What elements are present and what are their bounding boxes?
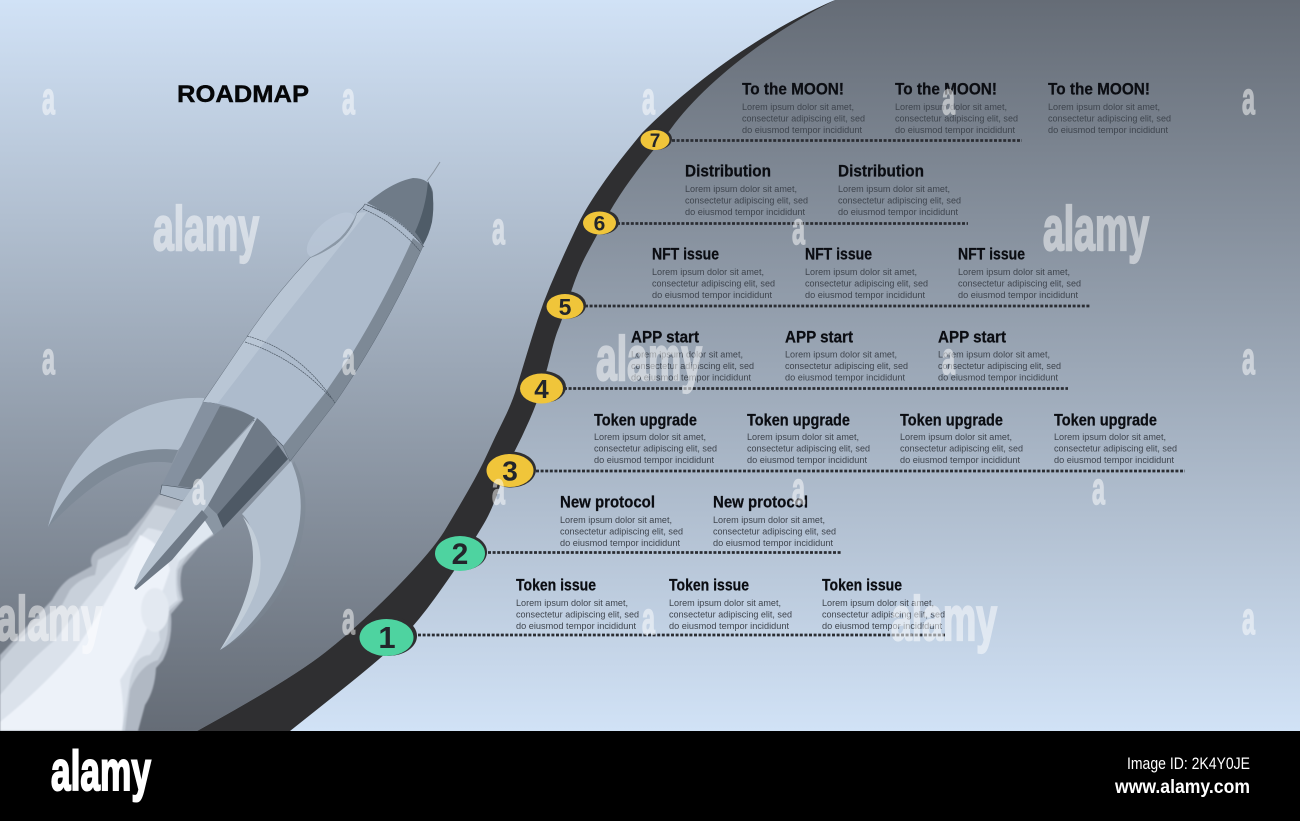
column 2: consectetur adipiscing elit, sed [785, 361, 908, 372]
column 4: do eiusmod tempor incididunt [1054, 455, 1174, 466]
watermarks: a [1242, 593, 1256, 644]
column 1: do eiusmod tempor incididunt [742, 125, 862, 136]
column 2: consectetur adipiscing elit, sed [895, 114, 1018, 124]
column 2: consectetur adipiscing elit, sed [805, 278, 928, 290]
column 1 [742, 80, 865, 136]
column 3: Lorem ipsum dolor sit amet, [900, 432, 1012, 443]
watermarks [0, 73, 1256, 654]
column 3: Token issue [822, 576, 902, 594]
column 2: Lorem ipsum dolor sit amet, [669, 598, 781, 609]
column 3 [822, 576, 945, 632]
marker 4 [520, 371, 566, 404]
column 1: Lorem ipsum dolor sit amet, [685, 184, 797, 195]
column 1: consectetur adipiscing elit, sed [742, 114, 865, 124]
marker 7: 7 [650, 131, 660, 152]
column 2: Lorem ipsum dolor sit amet, [785, 350, 897, 360]
column 4: Token upgrade [1054, 412, 1157, 430]
column 3 [958, 246, 1081, 301]
column 3: consectetur adipiscing elit, sed [938, 361, 1061, 372]
column 3 [900, 412, 1023, 466]
column 1: consectetur adipiscing elit, sed [631, 361, 754, 372]
column 2 [895, 80, 1018, 136]
marker 2: 2 [452, 538, 468, 571]
watermarks: a [792, 463, 806, 514]
watermarks: a [492, 463, 506, 514]
column 3 [1048, 80, 1171, 136]
column 2 [713, 494, 836, 549]
column 1 [631, 328, 754, 384]
watermarks: alamy [891, 585, 997, 654]
column 1: do eiusmod tempor incididunt [685, 207, 805, 218]
column 4: consectetur adipiscing elit, sed [1054, 444, 1177, 454]
centre fin [134, 418, 257, 590]
rocket body [203, 204, 423, 461]
column 4 [1054, 412, 1177, 466]
background: right panel [197, 0, 1300, 731]
column 1: do eiusmod tempor incididunt [516, 621, 636, 632]
watermarks: alamy [596, 325, 702, 394]
column 3: consectetur adipiscing elit, sed [1048, 114, 1171, 124]
watermarks: a [642, 593, 656, 644]
watermarks: a [192, 463, 206, 514]
column 2: APP start [785, 328, 853, 346]
column 3: consectetur adipiscing elit, sed [822, 610, 945, 620]
step 4 row [520, 328, 1068, 404]
column 1 [685, 162, 808, 218]
connector line [617, 222, 968, 225]
column 2: do eiusmod tempor incididunt [713, 538, 833, 549]
connector line [564, 387, 1068, 390]
column 3: Token upgrade [900, 412, 1003, 430]
watermarks: a [1092, 463, 1106, 514]
watermarks: a [792, 203, 806, 254]
column 1: Token issue [516, 576, 596, 594]
step 7 row [640, 80, 1171, 152]
marker 3: 3 [502, 456, 518, 486]
column 1: NFT issue [652, 246, 719, 264]
marker 5: 5 [559, 294, 572, 320]
marker 5 [546, 291, 586, 320]
column 3: Lorem ipsum dolor sit amet, [1048, 102, 1160, 113]
watermarks: a [342, 593, 356, 644]
body seam [245, 205, 424, 403]
watermarks: a [1242, 333, 1256, 384]
column 2: do eiusmod tempor incididunt [669, 621, 789, 632]
watermarks: a [342, 73, 356, 124]
column 2 [838, 162, 961, 218]
watermarks: alamy [1043, 195, 1149, 264]
column 2 [785, 328, 908, 384]
watermarks: alamy [153, 195, 259, 264]
column 2: do eiusmod tempor incididunt [838, 207, 958, 218]
column 3: do eiusmod tempor incididunt [1048, 125, 1168, 136]
lower body left [162, 402, 255, 488]
watermarks: a [42, 333, 56, 384]
column 2: do eiusmod tempor incididunt [747, 455, 867, 466]
column 2: Token issue [669, 576, 749, 594]
lower body dark shade [217, 445, 288, 528]
column 2: Distribution [838, 162, 924, 180]
watermarks: alamy [0, 585, 102, 654]
column 3: To the MOON! [1048, 80, 1150, 98]
column 2: To the MOON! [895, 80, 997, 98]
marker 3 [486, 452, 536, 488]
footer logo: alamy [51, 739, 151, 802]
column 1: Lorem ipsum dolor sit amet, [560, 515, 672, 526]
column 1: do eiusmod tempor incididunt [594, 455, 714, 466]
exhaust collar [160, 485, 192, 501]
left fin [48, 398, 204, 527]
watermarks: a [942, 73, 956, 124]
watermarks: a [342, 333, 356, 384]
watermarks: a [42, 73, 56, 124]
column 2: do eiusmod tempor incididunt [895, 125, 1015, 136]
curved road band [197, 0, 835, 731]
marker 1 [359, 616, 417, 656]
column 1: consectetur adipiscing elit, sed [652, 278, 775, 290]
column 1: New protocol [560, 494, 655, 512]
nose cone [367, 162, 440, 245]
column 1: APP start [631, 328, 699, 346]
column 2: consectetur adipiscing elit, sed [713, 526, 836, 538]
marker 2 [435, 534, 487, 571]
column 3: consectetur adipiscing elit, sed [958, 278, 1081, 290]
column 3: NFT issue [958, 246, 1025, 264]
connector line [672, 139, 1022, 142]
column 2: do eiusmod tempor incididunt [805, 290, 925, 301]
column 1 [516, 576, 639, 632]
marker 6: 6 [594, 212, 605, 236]
column 3: do eiusmod tempor incididunt [958, 290, 1078, 301]
body side shade [283, 238, 423, 461]
body highlight [203, 212, 367, 403]
column 2: Lorem ipsum dolor sit amet, [805, 267, 917, 278]
marker 1: 1 [378, 620, 396, 655]
column 3: do eiusmod tempor incididunt [938, 372, 1058, 384]
connector line [418, 634, 945, 636]
nozzle [202, 505, 223, 535]
column 1: do eiusmod tempor incididunt [652, 290, 772, 301]
column 1: do eiusmod tempor incididunt [560, 538, 680, 549]
rocket window [299, 205, 363, 265]
column 1: do eiusmod tempor incididunt [631, 372, 751, 384]
rocket illustration [0, 162, 440, 731]
column 1: consectetur adipiscing elit, sed [516, 610, 639, 620]
site url: www.alamy.com [1114, 777, 1250, 798]
column 1: consectetur adipiscing elit, sed [560, 526, 683, 538]
right fin [220, 461, 306, 650]
column 2 [669, 576, 792, 632]
column 1: Lorem ipsum dolor sit amet, [516, 598, 628, 609]
column 2: consectetur adipiscing elit, sed [747, 444, 870, 454]
column 1: consectetur adipiscing elit, sed [685, 196, 808, 206]
marker 4: 4 [534, 374, 549, 404]
column 3: do eiusmod tempor incididunt [900, 455, 1020, 466]
column 3 [938, 328, 1061, 384]
marker 7 [640, 128, 672, 152]
column 1: Lorem ipsum dolor sit amet, [594, 432, 706, 443]
column 1 [652, 246, 775, 301]
exhaust smoke [0, 494, 214, 731]
column 2: consectetur adipiscing elit, sed [838, 196, 961, 206]
connector line [536, 470, 1185, 472]
watermarks: a [492, 203, 506, 254]
step 5 row [546, 246, 1090, 320]
step 6 row [583, 162, 968, 236]
column 3: Lorem ipsum dolor sit amet, [822, 598, 934, 609]
column 2 [805, 246, 928, 301]
column 4: Lorem ipsum dolor sit amet, [1054, 432, 1166, 443]
column 2: Lorem ipsum dolor sit amet, [713, 515, 825, 526]
column 3: Lorem ipsum dolor sit amet, [958, 267, 1070, 278]
marker 6 [583, 210, 619, 236]
column 2: Lorem ipsum dolor sit amet, [838, 184, 950, 195]
column 1: Lorem ipsum dolor sit amet, [652, 267, 764, 278]
footer bar [0, 731, 1300, 821]
column 1: Token upgrade [594, 412, 697, 430]
step 3 row [486, 412, 1185, 488]
step 1 row [359, 576, 945, 656]
column 2: Lorem ipsum dolor sit amet, [747, 432, 859, 443]
column 3: consectetur adipiscing elit, sed [900, 444, 1023, 454]
column 2: Token upgrade [747, 412, 850, 430]
column 2: Lorem ipsum dolor sit amet, [895, 102, 1007, 113]
column 3: do eiusmod tempor incididunt [822, 621, 942, 632]
connector line [488, 551, 842, 554]
column 3: APP start [938, 328, 1006, 346]
connector line [585, 305, 1090, 307]
watermarks: a [942, 333, 956, 384]
title: ROADMAP [177, 81, 309, 108]
lower body right [208, 418, 278, 517]
column 1 [594, 412, 717, 466]
watermarks: a [1242, 73, 1256, 124]
image id: Image ID: 2K4Y0JE [1127, 754, 1250, 773]
column 2 [747, 412, 870, 466]
step 2 row [435, 494, 842, 571]
column 2: consectetur adipiscing elit, sed [669, 610, 792, 620]
column 1: consectetur adipiscing elit, sed [594, 444, 717, 454]
column 3: Lorem ipsum dolor sit amet, [938, 350, 1050, 360]
watermarks: a [642, 73, 656, 124]
column 1 [560, 494, 683, 549]
column 1: Lorem ipsum dolor sit amet, [631, 350, 743, 360]
column 1: Distribution [685, 162, 771, 180]
column 1: Lorem ipsum dolor sit amet, [742, 102, 854, 113]
column 2: New protocol [713, 494, 808, 512]
column 2: NFT issue [805, 246, 872, 264]
column 1: To the MOON! [742, 80, 844, 98]
column 2: do eiusmod tempor incididunt [785, 372, 905, 384]
window rim [310, 213, 357, 258]
